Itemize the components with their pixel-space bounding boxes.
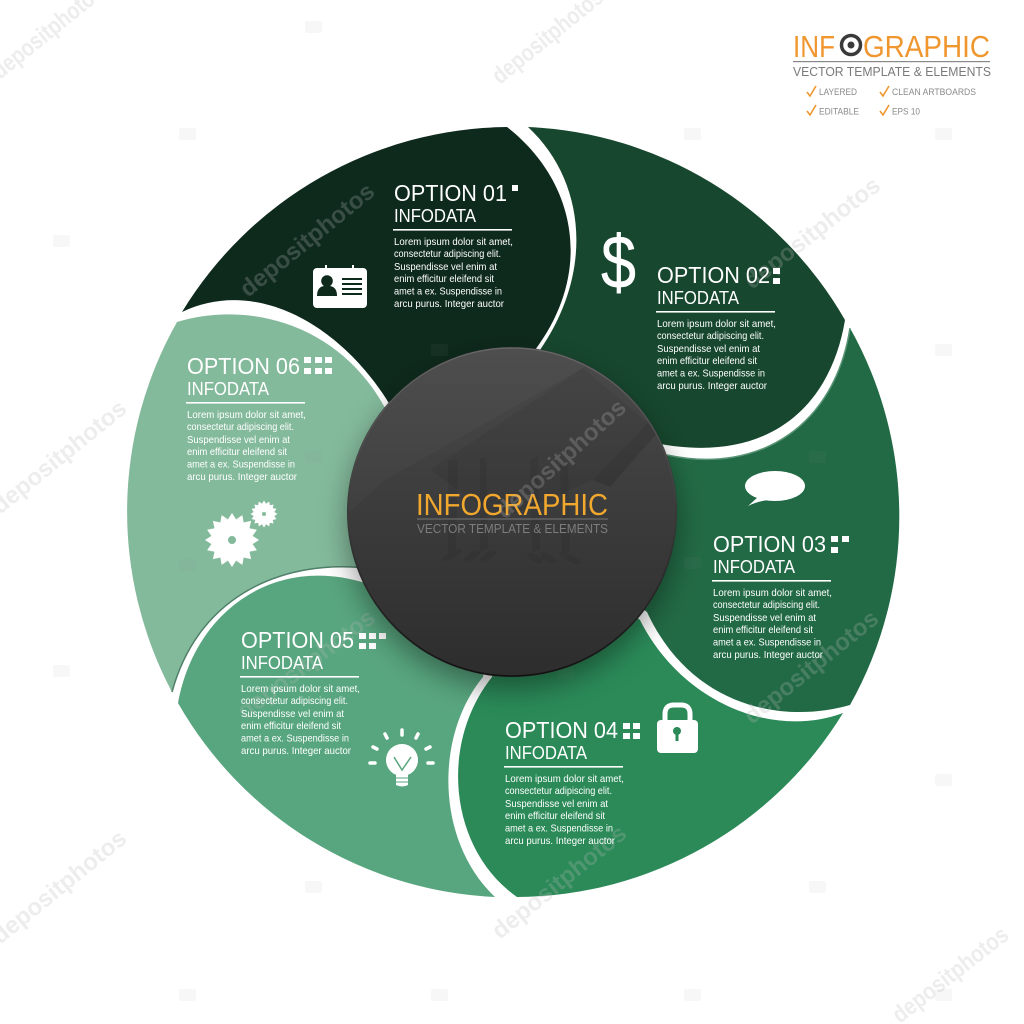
body text: Lorem ipsum dolor sit amet, xyxy=(394,236,513,248)
body text: Suspendisse vel enim at xyxy=(657,343,760,355)
icon: dollar sign: $ xyxy=(601,220,636,304)
subheading: INFODATA xyxy=(657,288,739,308)
body text: consectetur adipiscing elit. xyxy=(657,330,764,342)
icon: gears xyxy=(205,500,278,567)
body text: Lorem ipsum dolor sit amet, xyxy=(241,683,360,695)
text block: option 04 xyxy=(504,717,640,847)
number dots xyxy=(773,268,780,284)
logo subtitle: VECTOR TEMPLATE & ELEMENTS xyxy=(793,64,991,79)
number dots xyxy=(304,357,332,374)
feature checklist: EDITABLE xyxy=(819,106,859,118)
watermark: depositphotos marks: depositphotos xyxy=(487,820,632,945)
header logo xyxy=(793,29,991,118)
center hub: depositphotos xyxy=(491,394,632,524)
hub title: INFOGRAPHIC xyxy=(416,487,608,522)
icon: light bulb xyxy=(370,730,433,786)
subheading: INFODATA xyxy=(187,379,269,399)
body text: Lorem ipsum dolor sit amet, xyxy=(657,318,776,330)
text block: option 06 xyxy=(186,353,332,483)
body text: amet a ex. Suspendisse in xyxy=(657,368,765,380)
body text: Suspendisse vel enim at xyxy=(187,434,290,446)
number dots xyxy=(831,536,849,553)
body text: amet a ex. Suspendisse in xyxy=(187,458,295,470)
heading: option 04: OPTION 04 xyxy=(505,717,618,743)
body text: amet a ex. Suspendisse in xyxy=(394,286,502,298)
logo title xyxy=(793,29,990,64)
body text: amet a ex. Suspendisse in xyxy=(241,732,349,744)
panel: option 01 segment xyxy=(182,127,571,512)
body text: arcu purus. Integer auctor xyxy=(187,471,297,483)
body text: arcu purus. Integer auctor xyxy=(394,298,504,310)
body text: amet a ex. Suspendisse in xyxy=(713,636,821,648)
body text: amet a ex. Suspendisse in xyxy=(505,822,613,834)
body text: Suspendisse vel enim at xyxy=(505,798,608,810)
body text: Lorem ipsum dolor sit amet, xyxy=(187,409,306,421)
body text: enim efficitur eleifend sit xyxy=(713,624,813,636)
heading: option 06: OPTION 06 xyxy=(187,353,300,379)
text block: option 01 xyxy=(393,180,518,310)
hub subtitle: VECTOR TEMPLATE & ELEMENTS xyxy=(417,521,608,536)
body text: Suspendisse vel enim at xyxy=(713,612,816,624)
panel: option 04 segment xyxy=(458,512,843,897)
body text: enim efficitur eleifend sit xyxy=(505,810,605,822)
body text: consectetur adipiscing elit. xyxy=(187,421,294,433)
feature checklist: EPS 10 xyxy=(892,106,920,118)
body text xyxy=(713,587,832,661)
body text xyxy=(394,236,513,310)
heading: option 02: OPTION 02 xyxy=(657,262,770,288)
body text: consectetur adipiscing elit. xyxy=(394,248,501,260)
watermark: depositphotos marks: depositphotos xyxy=(232,604,380,725)
icon: id card xyxy=(313,265,367,308)
center hub xyxy=(340,340,677,677)
panel: option 03 segment xyxy=(512,328,899,712)
subheading: INFODATA xyxy=(713,557,795,577)
body text: consectetur adipiscing elit. xyxy=(505,785,612,797)
body text: enim efficitur eleifend sit xyxy=(187,446,287,458)
panel: option 06 segment xyxy=(127,314,512,692)
body text: arcu purus. Integer auctor xyxy=(713,649,823,661)
body text: enim efficitur eleifend sit xyxy=(657,355,757,367)
body text: Lorem ipsum dolor sit amet, xyxy=(505,773,624,785)
body text: consectetur adipiscing elit. xyxy=(241,695,348,707)
heading: option 05: OPTION 05 xyxy=(241,627,354,653)
body text: Lorem ipsum dolor sit amet, xyxy=(713,587,832,599)
number dots xyxy=(623,723,640,739)
subheading: INFODATA xyxy=(394,206,476,226)
body text: enim efficitur eleifend sit xyxy=(394,273,494,285)
body text: consectetur adipiscing elit. xyxy=(713,599,820,611)
feature checklist: CLEAN ARTBOARDS xyxy=(892,87,976,98)
logo title: INF xyxy=(793,29,835,64)
body text: Suspendisse vel enim at xyxy=(394,261,497,273)
text block: option 03 xyxy=(712,531,849,661)
watermark: depositphotos marks: depositphotos xyxy=(739,605,884,730)
panel: option 02 segment xyxy=(512,127,845,512)
body text: Suspendisse vel enim at xyxy=(241,708,344,720)
text block: option 05 xyxy=(240,627,386,757)
body text: arcu purus. Integer auctor xyxy=(657,380,767,392)
subheading: INFODATA xyxy=(505,743,587,763)
panel: option 05 segment xyxy=(178,512,512,897)
watermark: depositphotos marks: depositphotos xyxy=(235,178,380,303)
icon: padlock xyxy=(657,705,698,753)
watermark: depositphotos marks: depositphotos xyxy=(739,172,886,295)
feature checklist xyxy=(807,86,976,118)
number dots xyxy=(359,633,386,649)
text block: option 02 xyxy=(656,262,780,392)
heading: option 01: OPTION 01 xyxy=(394,180,507,206)
subheading: INFODATA xyxy=(241,653,323,673)
body text: arcu purus. Integer auctor xyxy=(241,745,351,757)
silhouette: faint people xyxy=(441,456,582,567)
number dots xyxy=(512,185,518,191)
body text xyxy=(657,318,776,392)
logo title: GRAPHIC xyxy=(863,29,990,64)
body text: enim efficitur eleifend sit xyxy=(241,720,341,732)
feature checklist: LAYERED xyxy=(819,87,857,98)
body text xyxy=(505,773,624,847)
icon: speech bubble xyxy=(745,471,805,506)
heading: option 03: OPTION 03 xyxy=(713,531,826,557)
body text xyxy=(187,409,306,483)
body text: arcu purus. Integer auctor xyxy=(505,835,615,847)
body text xyxy=(241,683,360,757)
